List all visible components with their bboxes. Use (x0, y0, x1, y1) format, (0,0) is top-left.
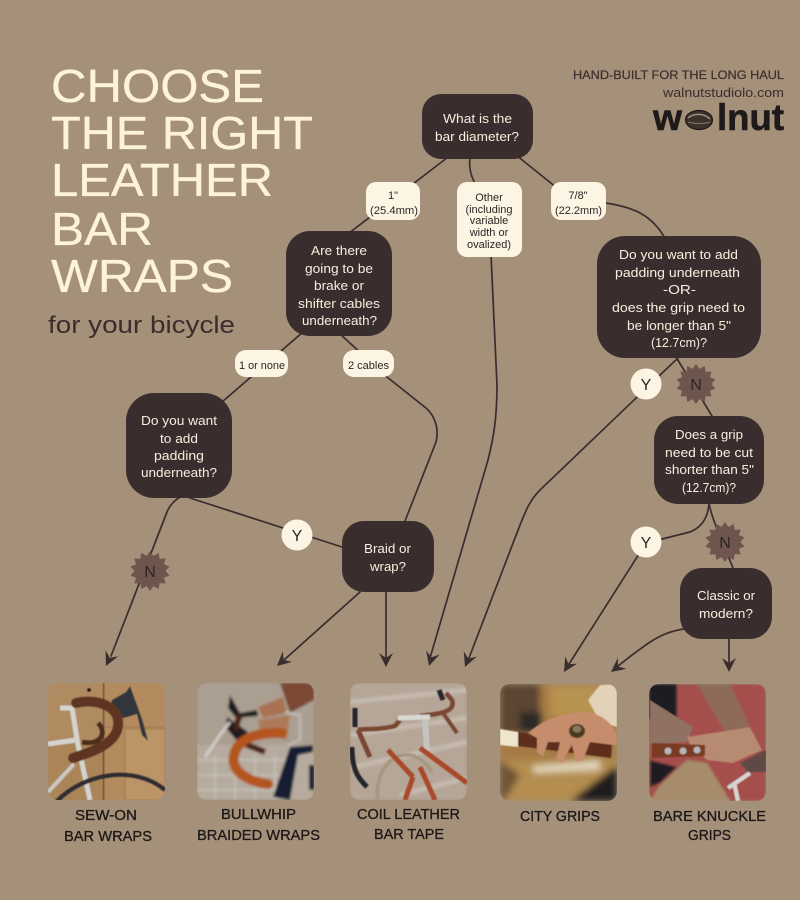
title (51, 60, 313, 302)
label: other: ovalized) (467, 239, 511, 251)
caption: bare knuckle grips (653, 809, 766, 844)
brand block: walnutstudiolo.com (662, 86, 784, 100)
title: CHOOSE (51, 60, 264, 112)
caption: sew-on bar wraps: SEW-ON (75, 808, 137, 824)
node: cut grip shorter: Does a grip (675, 427, 743, 442)
badge: yes long grip (630, 368, 662, 400)
node: padding or longer grip: (12.7cm)? (651, 335, 707, 350)
node: padding underneath: Do you want (141, 413, 217, 428)
caption: bullwhip braided wraps (197, 807, 320, 844)
caption: city grips: CITY GRIPS (520, 809, 600, 825)
arrow: braid question to coil leather tape (379, 592, 393, 667)
caption: coil leather bar tape: BAR TAPE (374, 827, 444, 843)
badge: no padding (126, 548, 174, 594)
node: braid or wrap: wrap? (369, 559, 406, 574)
arrow: classic or modern to bare knuckle grips (722, 639, 736, 672)
arrow: padding question no to sew-on (100, 497, 180, 669)
photo: city grips (500, 684, 617, 801)
arrow: cables question to 2 cables to braid question (340, 334, 437, 521)
node: cut grip shorter: need to be cut (665, 445, 753, 460)
node: brake or shifter cables: Are there (311, 243, 367, 258)
node: cut grip shorter: shorter than 5" (665, 462, 754, 477)
arrow: long grip no to cut grip question (676, 357, 712, 416)
badge: no cut grip (701, 519, 749, 565)
label: 7/8 inch: (22.2mm) (555, 205, 602, 217)
photo: bullwhip braided wraps (197, 683, 314, 800)
node: cut grip shorter: (12.7cm)? (682, 480, 736, 495)
badge: yes long grip: Y (641, 377, 652, 394)
node: padding underneath (126, 393, 232, 498)
arrow: cut grip no to classic or modern (709, 503, 733, 568)
node: padding underneath: to add (160, 431, 198, 446)
badge: yes padding: Y (292, 528, 303, 545)
node: brake or shifter cables: going to be (305, 261, 373, 276)
node: padding underneath: padding (154, 448, 204, 463)
node: classic or modern (680, 568, 772, 639)
title: WRAPS (51, 250, 233, 302)
caption: bare knuckle grips: BARE KNUCKLE (653, 809, 766, 825)
badge: yes cut grip: Y (641, 535, 652, 552)
caption: coil leather bar tape: COIL LEATHER (357, 807, 460, 823)
label: other: variable (470, 215, 508, 227)
arrow: padding question yes to braid question (190, 498, 342, 547)
node: classic or modern: Classic or (697, 588, 756, 603)
label: 2 cables (343, 350, 394, 377)
node: braid or wrap (342, 521, 434, 592)
label: 1 inch (366, 182, 420, 220)
node: cut grip shorter (654, 416, 764, 504)
node: padding or longer grip: padding underneath (615, 265, 740, 280)
caption: bare knuckle grips: GRIPS (688, 828, 731, 844)
badge: yes cut grip (630, 526, 662, 558)
node: what is the bar diameter (422, 94, 533, 159)
arrow: cut grip yes to city grips (558, 503, 709, 676)
arrow: cables question to 1 or none to padding question (222, 332, 303, 402)
caption: bullwhip braided wraps: BRAIDED WRAPS (197, 828, 320, 844)
brand block: w (652, 97, 682, 138)
label: 7/8 inch (551, 182, 606, 220)
node: brake or shifter cables: brake or (314, 278, 365, 293)
label: other: Other (475, 192, 503, 204)
node: braid or wrap: Braid or (364, 541, 412, 556)
node: padding or longer grip: -OR- (663, 282, 696, 297)
node: what is the bar diameter: bar diameter? (435, 129, 519, 144)
label: other: (including (465, 204, 513, 216)
node: brake or shifter cables: underneath? (302, 313, 377, 328)
photo: bare knuckle grips (649, 684, 766, 801)
photo: coil leather bar tape (350, 683, 467, 800)
badge: yes padding (282, 520, 312, 550)
node: padding or longer grip (597, 236, 761, 358)
title: LEATHER (51, 154, 273, 206)
label: 1 inch: 1" (388, 190, 398, 202)
arrow: bar diameter to 7/8 inch to padding question (516, 155, 666, 240)
arrow: long grip yes to coil leather tape (459, 356, 680, 670)
label: 1 or none: 1 or none (239, 360, 285, 372)
node: padding or longer grip: be longer than 5" (627, 318, 731, 333)
brand block: lnut (717, 97, 784, 138)
label: other (457, 182, 522, 257)
node: padding underneath: underneath? (141, 465, 217, 480)
node: brake or shifter cables (286, 231, 392, 336)
arrow: bar diameter to Other to coil leather tape (422, 158, 497, 668)
badge: no cut grip: N (719, 535, 731, 552)
arrow: classic or modern to city grips (607, 629, 684, 678)
label: 2 cables: 2 cables (348, 360, 389, 372)
title: BAR (51, 203, 153, 255)
caption: coil leather bar tape (357, 807, 460, 843)
node: padding or longer grip: does the grip need to (612, 300, 745, 315)
brand block (573, 68, 784, 138)
label: other: width or (469, 227, 509, 239)
caption: bullwhip braided wraps: BULLWHIP (221, 807, 296, 823)
arrow: bar diameter to 1 inch to cables question (340, 154, 452, 240)
label: 7/8 inch: 7/8" (568, 190, 588, 202)
node: brake or shifter cables: shifter cables (298, 296, 381, 311)
badge: no long grip: N (690, 377, 702, 394)
title: THE RIGHT (51, 107, 313, 159)
badge: no padding: N (144, 564, 156, 581)
caption: sew-on bar wraps (64, 808, 152, 845)
label: 1 or none (235, 350, 288, 377)
caption: sew-on bar wraps: BAR WRAPS (64, 829, 152, 845)
node: padding or longer grip: Do you want to add (619, 247, 738, 262)
photo: sew-on bar wraps (48, 683, 165, 802)
arrow: braid question to bullwhip (272, 592, 360, 671)
subtitle: for your bicycle (48, 312, 235, 339)
brand block: HAND-BUILT FOR THE LONG HAUL (573, 68, 784, 82)
label: 1 inch: (25.4mm) (370, 205, 418, 217)
badge: no long grip (672, 361, 720, 407)
node: what is the bar diameter: What is the (443, 111, 512, 126)
node: classic or modern: modern? (699, 606, 753, 621)
